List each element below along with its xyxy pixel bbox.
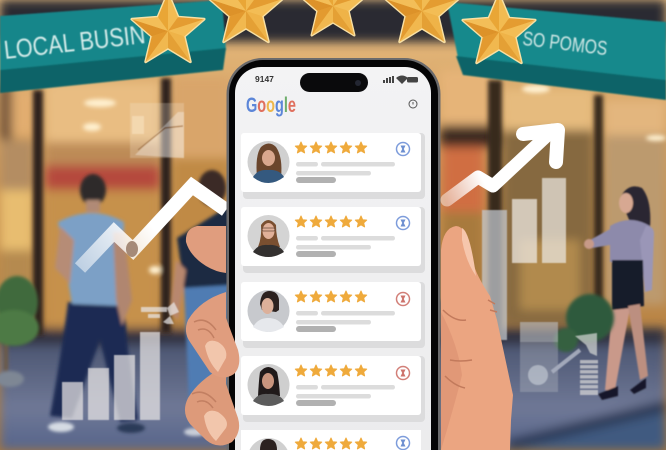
- awning: right: [447, 2, 666, 100]
- thumbnail: [462, 228, 476, 276]
- middle fingernail: [205, 341, 226, 372]
- awning sign text: SO POMOS: [521, 28, 608, 60]
- review card 5: [241, 430, 421, 450]
- awning: left: [0, 0, 226, 93]
- dynamic island: [300, 73, 368, 92]
- bar chart: right: [482, 178, 566, 340]
- avatar 1: [248, 141, 290, 183]
- verified badge 5: [396, 436, 410, 450]
- thumb shading: [441, 312, 462, 450]
- floating analytics card: bottom right: [520, 322, 598, 395]
- star 3: [299, 0, 367, 35]
- lower finger: [185, 366, 239, 446]
- star 2: [210, 0, 282, 42]
- top finger: [186, 226, 226, 273]
- star 1: [132, 0, 204, 62]
- star 4: [386, 0, 458, 42]
- flagged badge 4: [396, 366, 410, 380]
- person walking centre: [170, 170, 232, 436]
- avatar 2: [248, 215, 290, 257]
- person walking right: [584, 186, 654, 400]
- google logo: Google: [246, 94, 296, 117]
- review card 4: [241, 356, 425, 422]
- review card 3: [241, 282, 425, 348]
- avatar 3: [248, 290, 290, 332]
- status bar time: 9147: [255, 74, 274, 84]
- flagged badge 3: [396, 292, 410, 306]
- arrow: left rising trend: [80, 186, 226, 268]
- settings icon: [409, 100, 417, 108]
- middle finger: [186, 292, 239, 378]
- arrow: right rising trend: [447, 130, 558, 200]
- status icons: [383, 76, 418, 84]
- verified badge 2: [396, 216, 410, 230]
- verified badge 1: [396, 142, 410, 156]
- review card 2: [241, 207, 425, 273]
- review card 1: [241, 133, 425, 199]
- person walking left: [48, 174, 145, 433]
- awning sign text: LOCAL BUSIN: [2, 19, 147, 65]
- potted plants: [0, 276, 614, 387]
- floating chart card: top left: [130, 103, 184, 158]
- bar chart: left: [62, 302, 179, 420]
- phone: [226, 58, 440, 450]
- avatar 4: [248, 364, 290, 406]
- hand: left fingers: [185, 226, 239, 446]
- hand: right thumb: [441, 226, 513, 450]
- avatar 5: [250, 438, 288, 450]
- phone screen: [235, 67, 431, 450]
- floating gold stars: [132, 0, 535, 63]
- star 5: [463, 0, 535, 63]
- lower fingernail: [204, 411, 227, 441]
